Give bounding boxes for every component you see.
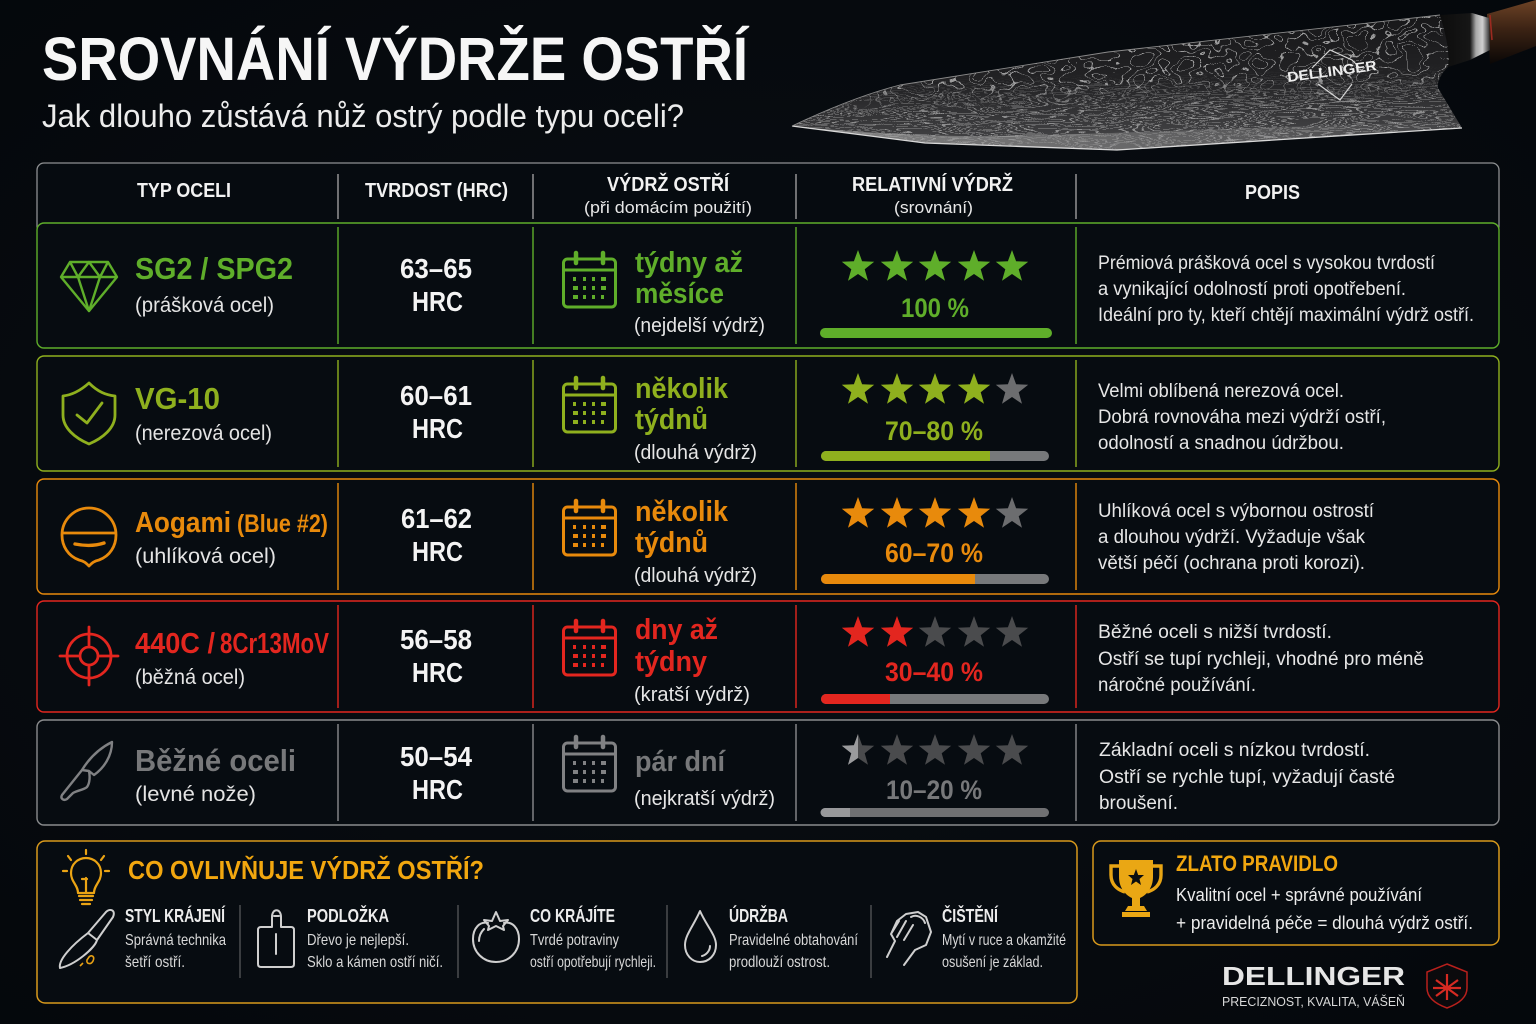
- item: styl krájení: Správná technika: [125, 932, 226, 949]
- item: co krájíte: CO KRÁJÍTE: [530, 905, 615, 926]
- row: Aogami: (uhlíková ocel): [135, 545, 276, 568]
- row: VG-10: HRC: [412, 413, 463, 444]
- icon: calendar: [564, 501, 616, 555]
- row: SG2 / SPG2: [37, 223, 1499, 348]
- row: Aogami: HRC: [412, 536, 463, 567]
- subtitle: Jak dlouho zůstává nůž ostrý podle typu oceli?: [42, 98, 684, 134]
- icon: knife cutting: [60, 910, 114, 968]
- icon: knife: [61, 742, 112, 800]
- item: údržba: prodlouží ostrost.: [729, 954, 830, 971]
- row: Běžné oceli: (levné nože): [135, 783, 256, 806]
- row: Aogami: (Blue #2): [237, 510, 328, 538]
- table header: VÝDRŽ OSTŘÍ: [607, 172, 729, 196]
- icon: calendar: [564, 253, 616, 307]
- panel: golden rule: Kvalitní ocel + správné používání: [1176, 884, 1423, 905]
- icon: calendar: [564, 378, 616, 432]
- icon: light bulb: [63, 850, 109, 904]
- row: Aogami: (dlouhá výdrž): [634, 565, 757, 587]
- row: SG2 / SPG2: HRC: [412, 286, 463, 317]
- table header: [37, 163, 1499, 233]
- panel: golden rule: ZLATO PRAVIDLO: [1176, 851, 1338, 876]
- row: 440C / 8Cr13MoV: 440C /: [135, 628, 215, 660]
- row: SG2 / SPG2: Ideální pro ty, kteří chtějí maximální výdrž ostří.: [1098, 305, 1474, 326]
- row: 440C / 8Cr13MoV: [37, 601, 1499, 712]
- row: Aogami: Aogami: [135, 507, 231, 539]
- row: 440C / 8Cr13MoV: (kratší výdrž): [634, 684, 750, 706]
- row: Aogami: Uhlíková ocel s výbornou ostrostí: [1098, 501, 1375, 522]
- icon: calendar: [564, 737, 616, 791]
- table header: (při domácím použití): [584, 198, 752, 217]
- row: 440C / 8Cr13MoV: Ostří se tupí rychleji, vhodné pro méně: [1098, 649, 1424, 670]
- row: 440C / 8Cr13MoV: 30–40 %: [885, 657, 983, 687]
- row: VG-10: Velmi oblíbená nerezová ocel.: [1098, 381, 1344, 402]
- item: čištění: Mytí v ruce a okamžité: [942, 932, 1066, 949]
- row: Běžné oceli: pár dní: [635, 746, 726, 778]
- brand logo: DELLINGER: [1222, 961, 1405, 991]
- table header: TYP OCELI: [137, 180, 231, 202]
- icon: tomato: [473, 912, 519, 962]
- row: VG-10: [37, 356, 1499, 471]
- row: Běžné oceli: Běžné oceli: [135, 743, 296, 778]
- row: Běžné oceli: Ostří se rychle tupí, vyžadují časté: [1099, 767, 1395, 788]
- row: Běžné oceli: [37, 720, 1499, 825]
- progress bar: [821, 694, 1049, 704]
- progress bar: [820, 808, 1049, 817]
- row: Běžné oceli: Základní oceli s nízkou tvrdostí.: [1099, 740, 1370, 761]
- icon: shield: [63, 383, 115, 444]
- row: Běžné oceli: 50–54: [400, 741, 472, 772]
- row: VG-10: odolností a snadnou údržbou.: [1098, 433, 1344, 454]
- row: SG2 / SPG2: 63–65: [400, 253, 472, 284]
- table header: TVRDOST (HRC): [365, 180, 508, 202]
- item: podložka: PODLOŽKA: [307, 905, 389, 926]
- panel: golden rule: [1093, 841, 1499, 945]
- row: VG-10: 60–61: [400, 380, 472, 411]
- row: SG2 / SPG2: a vynikající odolností proti opotřebení.: [1098, 279, 1406, 300]
- knife illustration: DELLINGER: [1286, 57, 1378, 85]
- row: Aogami: týdnů: [635, 527, 708, 559]
- row: VG-10: (nerezová ocel): [135, 422, 272, 445]
- row: VG-10: 70–80 %: [885, 416, 983, 446]
- row: Běžné oceli: 10–20 %: [886, 775, 982, 805]
- row: Aogami: a dlouhou výdrží. Vyžaduje však: [1098, 527, 1365, 548]
- progress bar: [821, 574, 1049, 584]
- row: VG-10: týdnů: [635, 404, 708, 436]
- item: údržba: Pravidelné obtahování: [729, 932, 858, 949]
- item: čištění: ČIŠTĚNÍ: [942, 905, 999, 926]
- icon: target: [60, 627, 118, 685]
- row: Aogami: [37, 479, 1499, 594]
- title: SROVNÁNÍ VÝDRŽE OSTŘÍ: [42, 25, 750, 93]
- stars: 2 of 5: [842, 616, 1028, 647]
- row: VG-10: (dlouhá výdrž): [634, 442, 757, 464]
- icon: water drop: [685, 911, 716, 962]
- row: 440C / 8Cr13MoV: (běžná ocel): [135, 666, 245, 689]
- icon: blade cross-section: [62, 508, 116, 566]
- table header: POPIS: [1245, 182, 1300, 204]
- item: podložka: [307, 905, 443, 971]
- row: 440C / 8Cr13MoV: týdny: [635, 646, 707, 678]
- knife illustration: [780, 0, 1536, 160]
- table header: (srovnání): [894, 198, 973, 217]
- row: Aogami: větší péčí (ochrana proti korozi).: [1098, 553, 1365, 574]
- table header: RELATIVNÍ VÝDRŽ: [852, 172, 1013, 196]
- item: údržba: [729, 905, 858, 971]
- item: co krájíte: ostří opotřebují rychleji.: [530, 954, 656, 971]
- panel: golden rule: + pravidelná péče = dlouhá výdrž ostří.: [1176, 912, 1473, 933]
- icon: washing hand: [887, 912, 931, 965]
- row: Aogami: 60–70 %: [885, 538, 983, 568]
- row: 440C / 8Cr13MoV: náročné používání.: [1098, 675, 1256, 696]
- stars: half of 5: [842, 734, 1028, 765]
- row: 440C / 8Cr13MoV: dny až: [635, 614, 718, 646]
- row: SG2 / SPG2: SG2 / SPG2: [135, 251, 293, 286]
- row: SG2 / SPG2: týdny až: [635, 247, 743, 279]
- item: čištění: osušení je základ.: [942, 954, 1043, 971]
- progress bar: [821, 451, 1049, 461]
- progress bar: [820, 328, 1052, 338]
- item: co krájíte: Tvrdé potraviny: [530, 932, 619, 949]
- row: SG2 / SPG2: měsíce: [635, 278, 724, 310]
- stars: 5 of 5: [842, 250, 1028, 281]
- item: podložka: Sklo a kámen ostří ničí.: [307, 954, 443, 971]
- icon: shield emblem: [1427, 964, 1467, 1008]
- row: 440C / 8Cr13MoV: 8Cr13MoV: [220, 628, 330, 660]
- icon: calendar: [564, 621, 616, 675]
- row: SG2 / SPG2: (nejdelší výdrž): [634, 315, 765, 337]
- item: čištění: [942, 905, 1066, 971]
- item: styl krájení: [125, 905, 226, 971]
- row: VG-10: Dobrá rovnováha mezi výdrží ostří,: [1098, 407, 1386, 428]
- row: SG2 / SPG2: 100 %: [901, 293, 969, 323]
- panel: factors: CO OVLIVŇUJE VÝDRŽ OSTŘÍ?: [128, 855, 484, 885]
- icon: cutting board: [258, 910, 294, 967]
- row: Aogami: 61–62: [401, 503, 472, 534]
- item: údržba: ÚDRŽBA: [729, 905, 788, 926]
- row: 440C / 8Cr13MoV: 56–58: [400, 624, 472, 655]
- row: Aogami: několik: [635, 496, 729, 528]
- stars: 4 of 5: [842, 497, 1028, 528]
- row: SG2 / SPG2: (prášková ocel): [135, 294, 274, 317]
- row: 440C / 8Cr13MoV: Běžné oceli s nižší tvrdostí.: [1098, 622, 1332, 643]
- stars: 4 of 5: [842, 373, 1028, 404]
- row: SG2 / SPG2: Prémiová prášková ocel s vysokou tvrdostí: [1098, 253, 1436, 274]
- row: Běžné oceli: (nejkratší výdrž): [634, 788, 775, 810]
- item: styl krájení: šetří ostří.: [125, 954, 185, 971]
- row: VG-10: několik: [635, 373, 729, 405]
- row: 440C / 8Cr13MoV: HRC: [412, 657, 463, 688]
- icon: trophy: [1111, 860, 1161, 917]
- row: VG-10: VG-10: [135, 381, 220, 416]
- row: Běžné oceli: HRC: [412, 774, 463, 805]
- panel: factors: [37, 841, 1077, 1003]
- brand logo: [1222, 961, 1467, 1009]
- item: podložka: Dřevo je nejlepší.: [307, 932, 409, 949]
- brand logo: PRECIZNOST, KVALITA, VÁŠEŇ: [1222, 994, 1405, 1009]
- item: styl krájení: STYL KRÁJENÍ: [125, 905, 226, 926]
- icon: diamond: [61, 262, 117, 311]
- item: co krájíte: [530, 905, 656, 971]
- row: Běžné oceli: broušení.: [1099, 793, 1178, 814]
